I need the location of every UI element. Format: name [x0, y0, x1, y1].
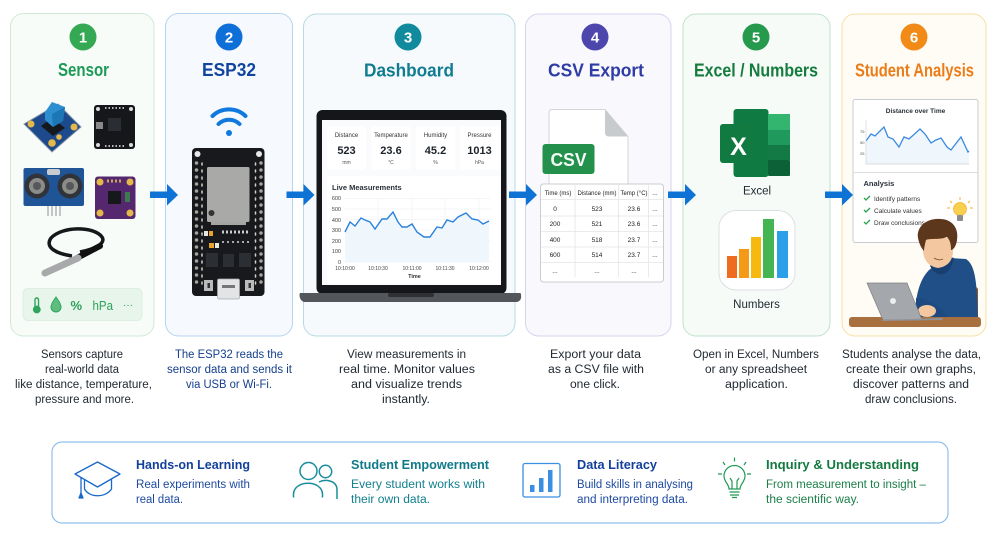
- description: step 5: application.: [725, 379, 788, 391]
- panel: step 6 student analysis: [842, 14, 986, 336]
- description: step 3: real time. Monitor values: [339, 364, 475, 376]
- icon: CSV file: [542, 110, 628, 186]
- data table: 521: [592, 221, 603, 228]
- description: step 3: [339, 349, 475, 406]
- icon: students: [294, 462, 337, 499]
- step number 3: [394, 24, 422, 50]
- icon: bar chart: [523, 464, 560, 497]
- benefit: hands-on learning: [75, 458, 250, 506]
- heading: Student Analysis: Student Analysis: [855, 60, 974, 80]
- line chart: live measurements: 10:10:00: [335, 266, 355, 272]
- icon: Excel: X: [730, 133, 747, 161]
- description: step 6: [842, 349, 981, 406]
- description: step 1: real-world data: [45, 364, 120, 376]
- metric card: humidity: Humidity: [424, 133, 447, 139]
- metric card: distance: 523: [337, 145, 356, 157]
- data table: 23.7: [628, 237, 641, 244]
- step number 1: 1: [79, 30, 87, 46]
- line chart: distance over time: 75: [860, 129, 865, 134]
- metric card: humidity: %: [433, 160, 438, 166]
- heading: ESP32: ESP32: [202, 60, 256, 80]
- benefit: data literacy: and interpreting data.: [577, 494, 688, 506]
- description: step 1: like distance, temperature,: [15, 379, 152, 391]
- arrow: step 1 to 2: [150, 184, 178, 206]
- arrow: step 3 to 4: [509, 184, 537, 206]
- line chart: live measurements: 400: [332, 218, 341, 224]
- metric card: distance: Distance: [335, 133, 359, 139]
- analysis card: [853, 100, 978, 242]
- data table: 523: [592, 206, 603, 213]
- data table: ...: [652, 237, 658, 244]
- data table: 23.7: [628, 252, 641, 259]
- panel: benefits: [52, 442, 948, 523]
- description: step 4: Export your data: [550, 349, 642, 361]
- step number 1: [70, 24, 96, 50]
- unit labels: ···: [123, 300, 133, 311]
- icon: lightbulb: [947, 197, 973, 221]
- icon: ultrasonic sensor: [24, 168, 84, 216]
- data table: 400: [550, 237, 561, 244]
- description: step 4: as a CSV file with: [548, 364, 644, 376]
- benefit: data literacy: [523, 458, 693, 506]
- analysis card: Analysis: [864, 179, 894, 188]
- step number 5: [742, 24, 770, 50]
- data table: ...: [652, 206, 658, 213]
- description: step 6: draw conclusions.: [865, 394, 957, 406]
- heading: Dashboard: Dashboard: [364, 60, 454, 80]
- panel: step 3 dashboard: [304, 14, 515, 336]
- student illustration: [849, 219, 981, 327]
- description: step 2: The ESP32 reads the: [175, 349, 283, 361]
- benefit: data literacy: Data Literacy: [577, 458, 657, 472]
- data table: ...: [652, 190, 658, 197]
- laptop dashboard: [300, 110, 521, 302]
- description: step 6: discover patterns and: [853, 379, 969, 391]
- metric card: humidity: 45.2: [425, 145, 446, 157]
- description: step 2: sensor data and sends it: [167, 364, 293, 376]
- benefit: inquiry and understanding: From measurement to insight –: [766, 479, 927, 491]
- icon: wifi: [212, 109, 246, 136]
- benefit: inquiry and understanding: [718, 458, 927, 506]
- unit labels: [70, 298, 133, 313]
- metric card: pressure: hPa: [475, 160, 484, 166]
- metric card: pressure: 1013: [467, 145, 492, 157]
- icon: humidity sensor board: [24, 102, 81, 152]
- data table: 600: [550, 252, 561, 259]
- line chart: distance over time: 50: [860, 140, 865, 145]
- data table: Distance (mm): [577, 191, 617, 197]
- heading: CSV Export: CSV Export: [548, 60, 644, 80]
- description: step 6: create their own graphs,: [846, 364, 976, 376]
- data table: ...: [652, 252, 658, 259]
- description: step 5: [693, 349, 819, 391]
- heading: Excel / Numbers: Excel / Numbers: [694, 60, 818, 80]
- description: step 3: View measurements in: [347, 349, 466, 361]
- analysis card: Identify patterns: [874, 196, 921, 203]
- metric card: distance: [327, 126, 366, 170]
- line chart: live measurements: 200: [332, 239, 341, 245]
- benefit: student empowerment: Student Empowerment: [351, 458, 490, 472]
- panel: step 1 sensor: [10, 14, 154, 336]
- data table: Time (ms): [545, 191, 571, 197]
- data table: ...: [631, 268, 637, 275]
- step number 3: 3: [404, 30, 412, 46]
- data table: 200: [550, 221, 561, 228]
- step number 2: [216, 24, 242, 50]
- description: step 4: [548, 349, 644, 391]
- data table: ...: [652, 221, 658, 228]
- line chart: live measurements: 10:10:30: [368, 266, 388, 272]
- icon: Excel: Excel: [743, 186, 771, 198]
- description: step 2: via USB or Wi-Fi.: [186, 379, 272, 391]
- benefit: hands-on learning: Real experiments with: [136, 479, 250, 491]
- data table: 23.6: [628, 206, 641, 213]
- metric card: distance: mm: [342, 160, 351, 166]
- panel: step 2 ESP32: [166, 14, 292, 336]
- description: step 1: Sensors capture: [41, 349, 123, 361]
- line chart: live measurements: 10:11:00: [402, 266, 422, 272]
- data table: 0: [553, 206, 557, 213]
- metric card: temperature: [371, 126, 410, 170]
- data table: 514: [592, 252, 603, 259]
- unit labels: %: [70, 298, 82, 313]
- line chart: live measurements: 100: [332, 249, 341, 255]
- icon: thermometer: [34, 298, 40, 313]
- metric card: temperature: 23.6: [380, 145, 402, 157]
- line chart: live measurements: 600: [332, 196, 341, 202]
- step number 6: [900, 24, 928, 50]
- icon: Numbers: Numbers: [733, 299, 780, 311]
- arrow: step 2 to 3: [286, 184, 314, 206]
- arrow: step 4 to 5: [668, 184, 696, 206]
- arrow: step 5 to 6: [825, 184, 853, 206]
- icon: temperature probe: [45, 229, 103, 273]
- step number 4: [582, 24, 608, 50]
- benefit: hands-on learning: Hands-on Learning: [136, 458, 250, 472]
- description: step 1: [15, 349, 152, 406]
- benefit: student empowerment: their own data.: [351, 494, 430, 506]
- description: step 6: Students analyse the data,: [842, 349, 981, 361]
- description: step 4: one click.: [570, 379, 620, 391]
- step number 4: 4: [591, 30, 600, 46]
- step number 6: 6: [910, 30, 918, 46]
- description: step 5: or any spreadsheet: [705, 364, 808, 376]
- benefit: student empowerment: Every student works with: [351, 479, 485, 491]
- line chart: distance over time: 25: [860, 151, 865, 156]
- step number 2: 2: [225, 30, 233, 46]
- step number 5: 5: [752, 30, 760, 46]
- line chart: live measurements: [327, 176, 500, 283]
- data table: 518: [592, 237, 603, 244]
- metric card: pressure: [460, 126, 500, 170]
- line chart: live measurements: Live Measurements: [332, 183, 402, 192]
- benefit: inquiry and understanding: Inquiry & Understanding: [766, 458, 919, 472]
- icon: black sensor board: [94, 105, 135, 149]
- benefit: data literacy: Build skills in analysing: [577, 479, 693, 491]
- panel: step 5 Excel / Numbers: [683, 14, 830, 336]
- heading: Sensor: Sensor: [58, 60, 109, 80]
- benefit: student empowerment: [294, 458, 490, 506]
- metric card: temperature: °C: [388, 160, 394, 166]
- description: step 3: instantly.: [382, 394, 430, 406]
- icon: CSV file: CSV: [550, 150, 586, 170]
- panel: step 4 CSV export: [526, 14, 671, 336]
- line chart: live measurements: Time: [408, 274, 421, 280]
- line chart: live measurements: 0: [338, 260, 341, 266]
- icon: light bulb: [718, 458, 751, 498]
- metric card: pressure: Pressure: [467, 133, 492, 139]
- metric card: humidity: [416, 126, 456, 170]
- benefit: hands-on learning: real data.: [136, 494, 183, 506]
- icon: purple sensor board: [95, 176, 136, 219]
- analysis card: Draw conclusions: [874, 220, 926, 227]
- analysis card: Distance over Time: [886, 108, 946, 115]
- data table: ...: [594, 268, 600, 275]
- description: step 1: pressure and more.: [35, 394, 134, 406]
- data table: 23.6: [628, 221, 641, 228]
- analysis card: Calculate values: [874, 208, 922, 215]
- benefit: inquiry and understanding: the scientific way.: [766, 494, 859, 506]
- line chart: distance over time: [860, 120, 969, 164]
- unit labels: hPa: [92, 298, 114, 313]
- icon: graduation cap: [75, 462, 120, 498]
- description: step 2: [167, 349, 293, 391]
- line chart: live measurements: 500: [332, 207, 341, 213]
- icon: Excel: [720, 109, 790, 198]
- line chart: live measurements: 10:11:30: [435, 266, 455, 272]
- description: step 3: and visualize trends: [351, 379, 462, 391]
- line chart: live measurements: 10:12:00: [469, 266, 489, 272]
- data table: Temp (°C): [620, 191, 648, 197]
- data table: ...: [552, 268, 558, 275]
- ESP32 board: [192, 148, 264, 299]
- description: step 5: Open in Excel, Numbers: [693, 349, 819, 361]
- metric card: temperature: Temperature: [374, 133, 409, 139]
- line chart: live measurements: 300: [332, 228, 341, 234]
- icon: water drop: [51, 297, 61, 312]
- icon: Numbers: [719, 210, 795, 311]
- data table: [540, 184, 664, 282]
- units strip: [23, 288, 142, 320]
